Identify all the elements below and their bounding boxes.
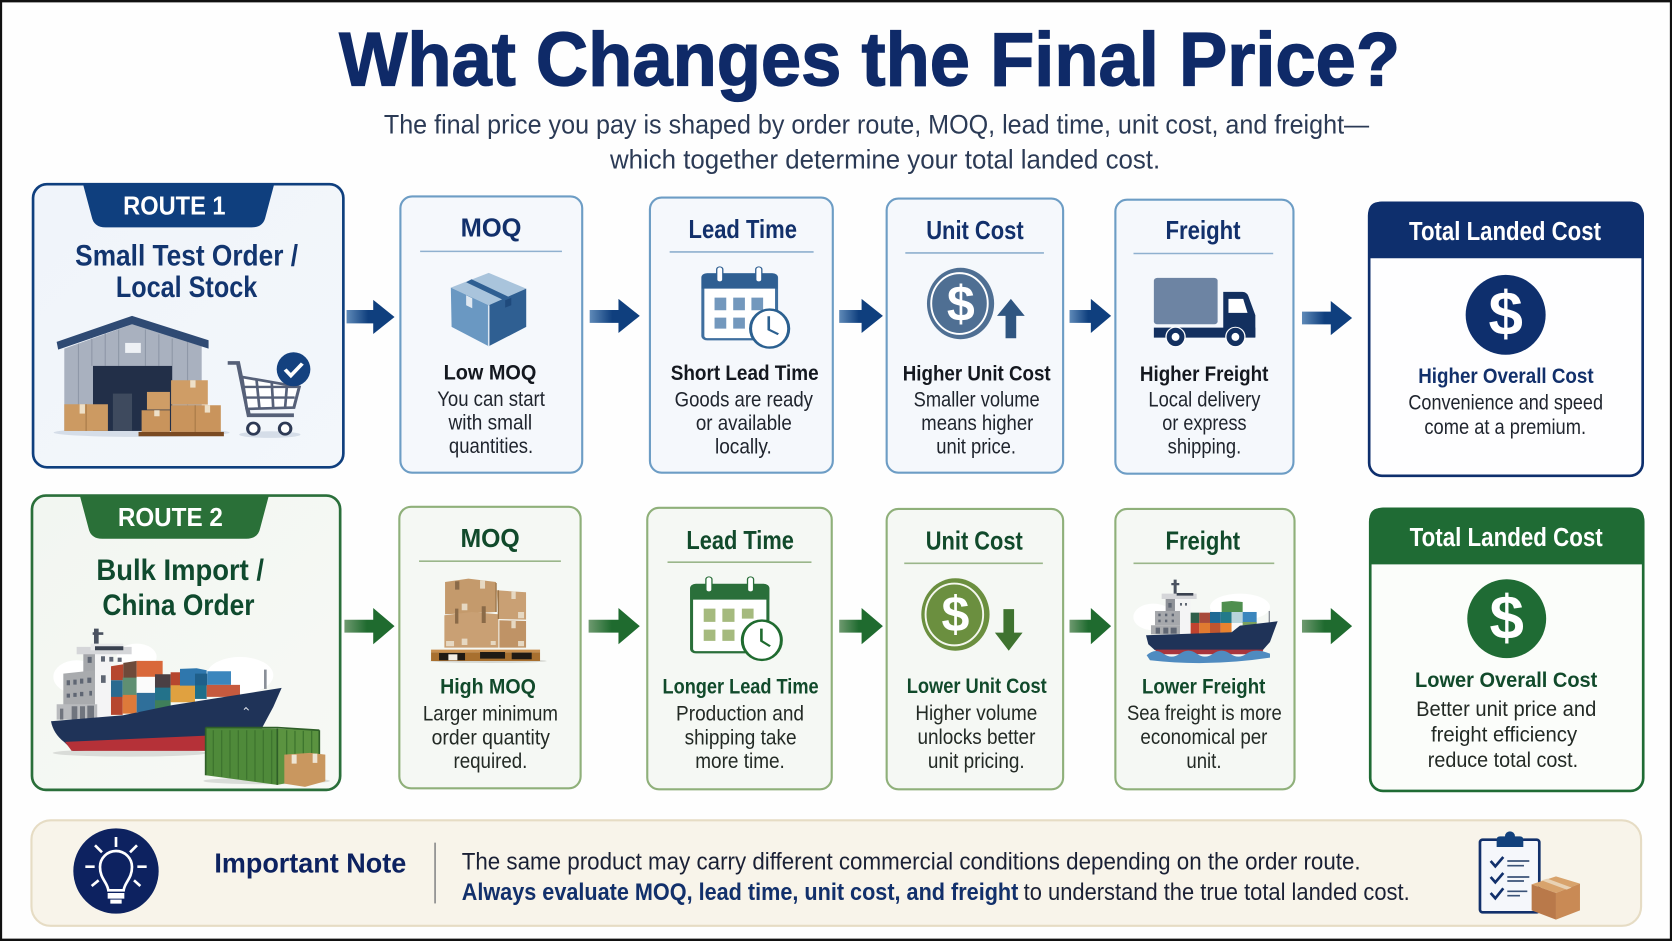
icon: pallet of boxes: [430, 579, 547, 663]
route 1 heading: Small Test Order /: [75, 240, 298, 273]
description: with small: [448, 412, 532, 435]
description: Lower Overall Cost: [1415, 668, 1597, 692]
icon: small cargo ship on waves: [1133, 580, 1278, 663]
route 2 tab: [80, 496, 269, 539]
heading: MOQ: [460, 523, 520, 553]
heading: MOQ: [461, 212, 521, 242]
description: quantities.: [449, 435, 533, 458]
title: What Changes the Final Price?: [339, 18, 1400, 103]
route 1 tab: [83, 185, 274, 227]
arrow: route 2 to MOQ: [344, 608, 395, 644]
description: Low MOQ: [444, 362, 536, 385]
icon: delivery truck: [1154, 278, 1255, 347]
description: [663, 675, 819, 773]
route 1 label: ROUTE 1: [123, 191, 226, 221]
note text: to understand the true total landed cost.: [1024, 879, 1410, 906]
header text: Total Landed Cost: [1409, 218, 1601, 246]
icon: dollar circle: [1466, 275, 1546, 355]
arrow: unit cost to freight: [1070, 299, 1111, 333]
description: Short Lead Time: [671, 362, 819, 385]
description: come at a premium.: [1424, 416, 1586, 439]
description: Higher Unit Cost: [903, 362, 1051, 385]
route 2 label: ROUTE 2: [118, 502, 223, 532]
card: lead time route 1: [650, 198, 833, 473]
heading: Lead Time: [686, 525, 794, 555]
card: freight route 1: [1115, 200, 1293, 474]
description: economical per: [1140, 726, 1267, 749]
note text: The same product may carry different commercial conditions depending on the order route.: [462, 848, 1361, 875]
route 2 heading: [96, 554, 264, 622]
icon: dollar circle: $: [1488, 280, 1523, 349]
description: Local delivery: [1148, 389, 1261, 412]
illustration: container ship and container: [51, 629, 330, 787]
subtitle: The final price you pay is shaped by order route, MOQ, lead time, unit cost, and freight—: [384, 110, 1369, 140]
arrow: lead time to unit cost: [839, 299, 883, 333]
icon: dollar circle: $: [1490, 584, 1524, 653]
icon: light bulb: [73, 828, 159, 914]
description: [1415, 668, 1597, 772]
description: [1140, 363, 1268, 458]
card: lead time route 2: [647, 508, 832, 789]
heading: Unit Cost: [926, 525, 1023, 555]
description: unlocks better: [917, 726, 1035, 749]
icon: checklist and box: [1480, 831, 1580, 920]
description: [1127, 675, 1282, 773]
description: [671, 362, 819, 458]
description: required.: [454, 750, 527, 773]
description: [437, 362, 545, 458]
description: reduce total cost.: [1428, 748, 1578, 772]
description: freight efficiency: [1431, 722, 1577, 746]
route 1 heading: Local Stock: [116, 271, 258, 304]
arrow: lead time to unit cost: [839, 608, 883, 644]
card: total landed cost route 1: [1368, 202, 1643, 476]
description: [423, 676, 558, 773]
panel: route 1: [33, 184, 343, 467]
subtitle: which together determine your total landed cost.: [609, 145, 1160, 175]
description: Longer Lead Time: [663, 675, 819, 698]
heading: Lead Time: [689, 214, 797, 244]
icon: calendar with clock: [690, 577, 781, 660]
route 2 heading: China Order: [102, 589, 255, 622]
heading: Unit Cost: [926, 215, 1024, 245]
description: or available: [696, 412, 792, 435]
icon: coin with up arrow: $: [947, 276, 975, 332]
description: Larger minimum: [423, 703, 558, 726]
description: Convenience and speed: [1408, 392, 1603, 415]
description: [1408, 364, 1603, 439]
icon: box: [451, 273, 526, 346]
icon: coin with down arrow: $: [941, 587, 969, 643]
description: locally.: [715, 435, 772, 458]
description: Better unit price and: [1416, 697, 1596, 721]
arrow: MOQ to lead time: [590, 299, 640, 333]
route 2 heading: Bulk Import /: [96, 554, 264, 587]
icon: coin with down arrow: [921, 578, 1023, 651]
description: or express: [1162, 412, 1247, 435]
description: Lower Unit Cost: [907, 675, 1047, 698]
description: [903, 362, 1051, 458]
description: Goods are ready: [675, 389, 814, 412]
description: Lower Freight: [1142, 675, 1265, 698]
card: freight route 2: [1115, 509, 1295, 789]
description: more time.: [695, 750, 785, 773]
description: shipping.: [1168, 435, 1241, 458]
panel: important note: [31, 820, 1641, 926]
description: order quantity: [432, 727, 550, 750]
description: Sea freight is more: [1127, 702, 1282, 725]
panel: route 2: [32, 496, 340, 790]
description: [907, 675, 1047, 773]
header bar: [1369, 508, 1644, 564]
note text: [462, 848, 1410, 906]
card: unit cost route 2: [887, 509, 1063, 789]
heading: Freight: [1165, 215, 1241, 245]
arrow: unit cost to freight: [1070, 608, 1111, 644]
card: unit cost route 1: [887, 199, 1063, 473]
description: Higher volume: [915, 702, 1037, 725]
description: Smaller volume: [914, 389, 1040, 412]
arrow: freight to total: [1302, 608, 1352, 644]
arrow: route 1 to MOQ: [347, 300, 395, 334]
description: Production and: [676, 703, 804, 726]
card: total landed cost route 2: [1369, 508, 1644, 791]
description: High MOQ: [440, 676, 536, 699]
description: means higher: [921, 412, 1033, 435]
description: unit pricing.: [928, 750, 1025, 773]
icon: coin with up arrow: [927, 268, 1025, 339]
header bar: [1368, 202, 1643, 258]
description: Higher Overall Cost: [1418, 364, 1594, 388]
route 1 heading: [75, 240, 298, 304]
icon: dollar circle: [1467, 579, 1546, 658]
description: You can start: [437, 388, 545, 411]
heading: Freight: [1165, 525, 1240, 555]
description: Higher Freight: [1140, 363, 1268, 386]
note text: Always evaluate MOQ, lead time, unit cost, and freight: [462, 879, 1018, 906]
subtitle: [384, 110, 1369, 175]
card: MOQ route 1: [400, 196, 582, 473]
description: shipping take: [685, 727, 797, 750]
note heading: Important Note: [214, 848, 406, 879]
header text: Total Landed Cost: [1410, 524, 1603, 552]
description: unit.: [1186, 750, 1221, 773]
arrow: freight to total: [1302, 301, 1352, 335]
card: MOQ route 2: [399, 507, 581, 788]
arrow: MOQ to lead time: [589, 608, 640, 644]
description: unit price.: [936, 435, 1016, 458]
illustration: warehouse with boxes and cart: [54, 316, 310, 438]
icon: calendar with clock: [702, 267, 789, 348]
